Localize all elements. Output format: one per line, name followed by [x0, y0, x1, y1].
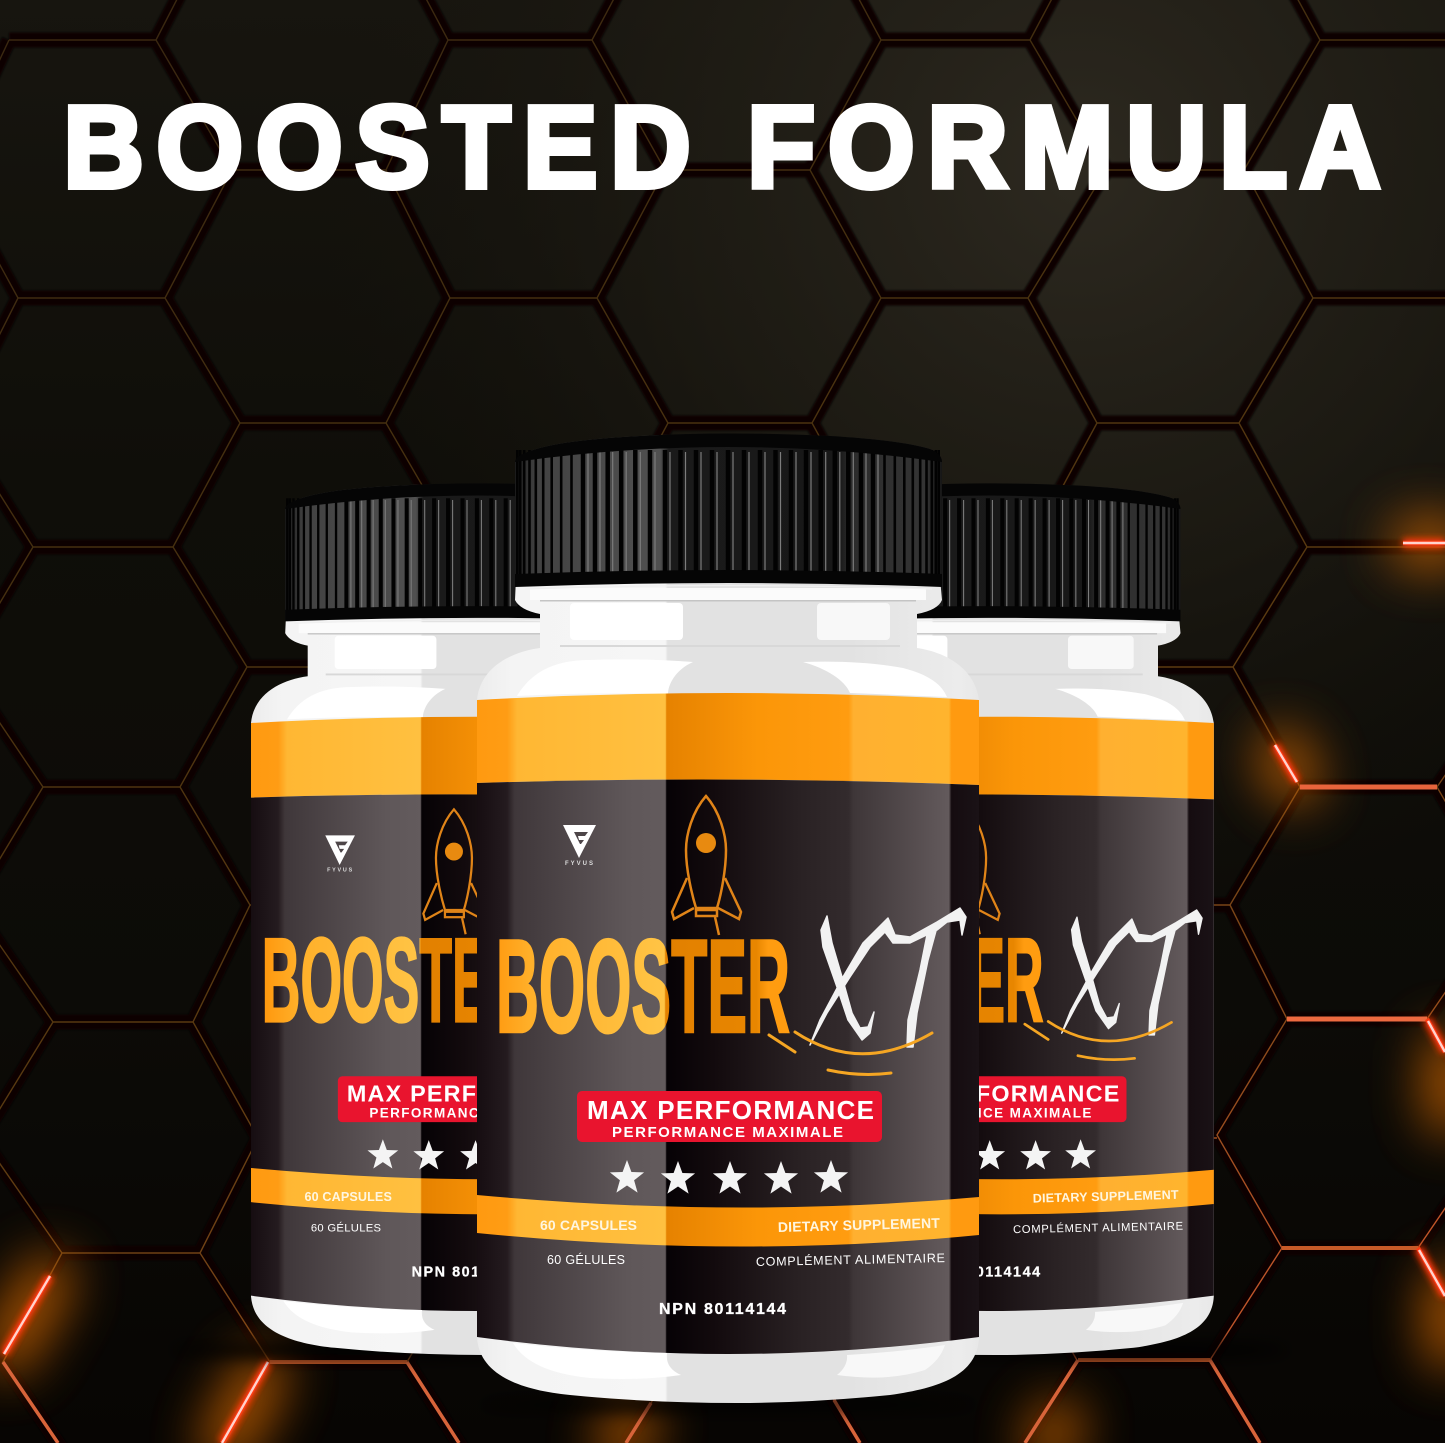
- base highlights: [794, 1301, 1183, 1333]
- bottle body shape: [762, 613, 1214, 1355]
- label small print: [540, 1215, 945, 1318]
- dark label: [251, 794, 703, 1311]
- right bottle: [762, 483, 1214, 1355]
- top orange band: [251, 717, 703, 799]
- neck and shoulder highlights: [798, 622, 1185, 720]
- max performance badge: MAX PERFORMANCE: [347, 1080, 605, 1106]
- screw cap: [796, 483, 1180, 623]
- label small print: 60 GÉLULES: [825, 1221, 895, 1234]
- max performance badge: MAX PERFORMANCE: [587, 1095, 874, 1125]
- right bottle: BOOSTER: [779, 915, 1044, 1047]
- left bottle: BOOSTER: [262, 915, 526, 1047]
- label small print: [819, 1188, 1184, 1280]
- brand logo: FYVUS: [565, 861, 595, 867]
- lower orange stripe: [251, 1168, 703, 1214]
- XT underline swooshes: [769, 1032, 932, 1074]
- brand logo: [839, 835, 869, 873]
- max performance badge: [338, 1076, 612, 1122]
- label small print: DIETARY SUPPLEMENT: [518, 1188, 665, 1206]
- screw cap: [515, 434, 942, 589]
- label small print: 60 CAPSULES: [819, 1190, 906, 1204]
- rocket icon: [672, 796, 741, 935]
- base highlights: [513, 1343, 945, 1379]
- dark label: [477, 779, 979, 1354]
- brand logo: [563, 825, 596, 867]
- lower orange stripe: [477, 1195, 979, 1247]
- top orange band: [762, 717, 1214, 799]
- label small print: 60 GÉLULES: [311, 1221, 381, 1234]
- label small print: DIETARY SUPPLEMENT: [778, 1215, 940, 1235]
- XT handwritten mark: [810, 908, 966, 1047]
- label small print: 60 GÉLULES: [547, 1252, 625, 1267]
- five star rating: [610, 1160, 848, 1194]
- base highlights: [283, 1301, 672, 1333]
- neon red hexagon edges: [3, 543, 1445, 1443]
- XT handwritten mark: [1062, 910, 1202, 1035]
- brand logo: FYVUS: [841, 867, 868, 873]
- rocket icon: [423, 809, 485, 934]
- orange glow around lit hexagon edges: [8, 543, 1445, 1443]
- XT handwritten mark: [551, 910, 691, 1035]
- max performance badge: PERFORMANCE MAXIMALE: [369, 1106, 577, 1121]
- title: BOOSTED FORMULA: [63, 83, 1380, 213]
- XT underline swooshes: [1025, 1021, 1172, 1060]
- max performance badge: PERFORMANCE MAXIMALE: [612, 1124, 843, 1141]
- label small print: COMPLÉMENT ALIMENTAIRE: [756, 1250, 945, 1269]
- ground shadows below bottles: [170, 1342, 1290, 1411]
- neck and shoulder highlights: [287, 622, 674, 720]
- neck and shoulder highlights: [517, 588, 947, 697]
- five star rating: [882, 1139, 1096, 1169]
- top orange band: [477, 693, 979, 785]
- max performance badge: MAX PERFORMANCE: [861, 1080, 1119, 1106]
- label small print: COMPLÉMENT ALIMENTAIRE: [499, 1220, 670, 1236]
- center bottle: BOOSTER: [496, 913, 790, 1061]
- left bottle: [251, 483, 703, 1355]
- bottle body shape: [251, 613, 703, 1355]
- dark label: [762, 794, 1214, 1311]
- brand logo: FYVUS: [327, 867, 354, 873]
- label small print: 60 CAPSULES: [540, 1217, 637, 1233]
- label small print: 60 CAPSULES: [305, 1190, 392, 1204]
- max performance badge: [852, 1076, 1126, 1122]
- label small print: NPN 80114144: [659, 1301, 786, 1318]
- lower orange stripe: [762, 1168, 1214, 1214]
- label small print: NPN 80114144: [412, 1264, 526, 1280]
- max performance badge: PERFORMANCE MAXIMALE: [884, 1106, 1091, 1121]
- bottle body shape: [477, 578, 979, 1403]
- max performance badge: [577, 1091, 882, 1142]
- label small print: [305, 1188, 670, 1280]
- rocket icon: [938, 809, 1000, 934]
- screw cap: [285, 483, 670, 623]
- label small print: COMPLÉMENT ALIMENTAIRE: [1013, 1220, 1184, 1236]
- XT underline swooshes: [514, 1021, 660, 1060]
- center bottle: [477, 434, 979, 1403]
- label small print: DIETARY SUPPLEMENT: [1033, 1188, 1179, 1206]
- brand logo: [325, 835, 355, 873]
- five star rating: [367, 1139, 582, 1169]
- label small print: NPN 80114144: [926, 1264, 1040, 1280]
